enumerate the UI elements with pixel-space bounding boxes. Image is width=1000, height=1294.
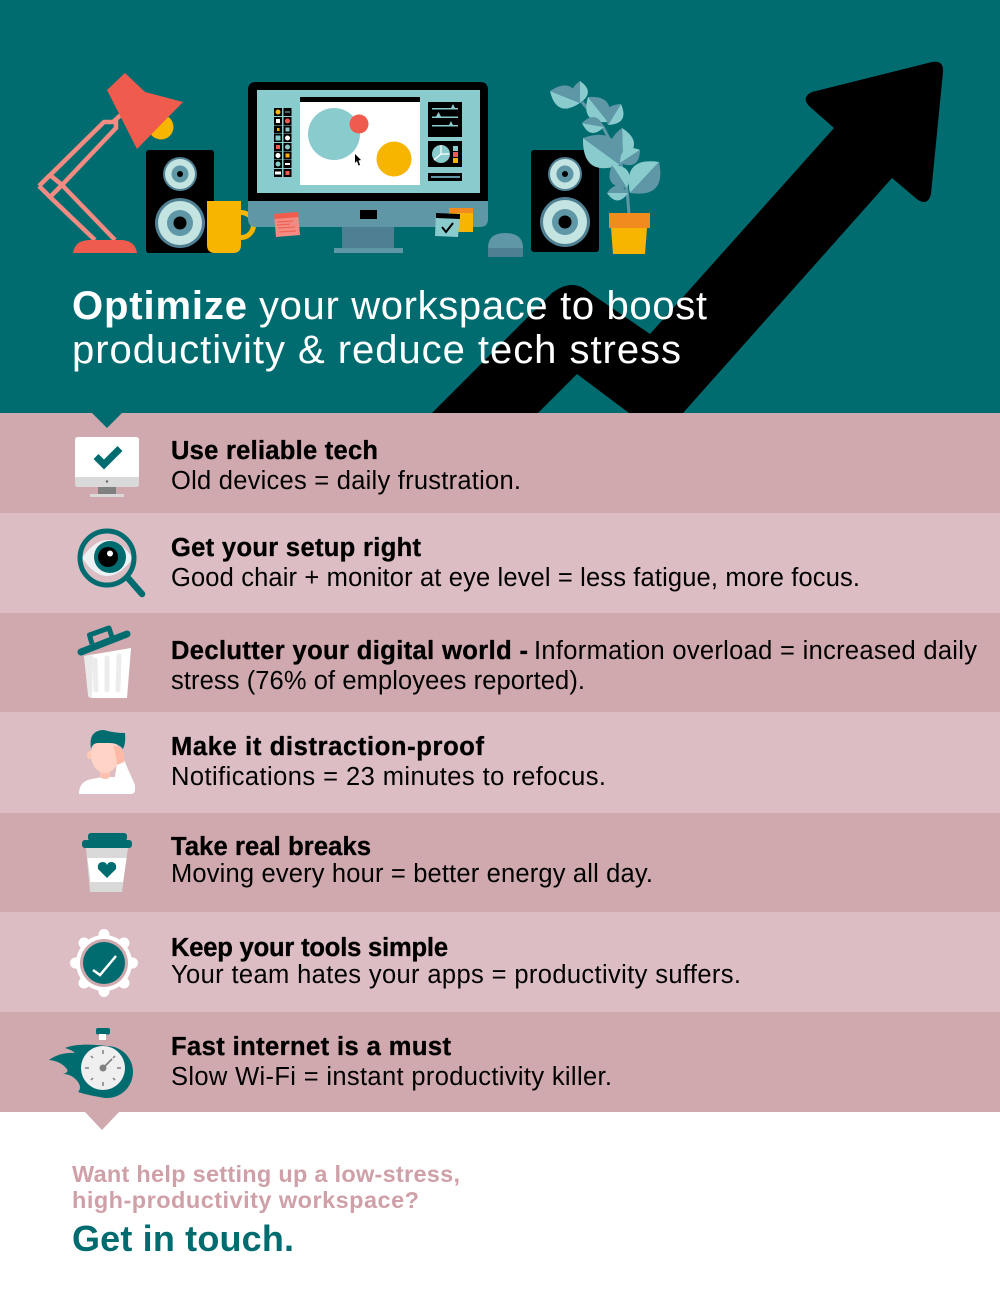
row: declutter: [81, 628, 977, 698]
title line two: productivity & reduce tech stress: [72, 328, 681, 372]
heading: Take real breaks: [171, 833, 371, 861]
illustration: left speaker: [146, 150, 214, 253]
prompt line one: Want help setting up a low-stress,: [72, 1161, 460, 1187]
icon: coffee cup: [82, 833, 132, 892]
pointer: footer notch: [85, 1112, 119, 1130]
title: Optimize: [72, 284, 247, 328]
title line one remainder: your workspace to boost: [259, 284, 707, 328]
icon: eye magnifier: [80, 531, 142, 594]
icon: person: [79, 730, 135, 794]
heading: Use reliable tech: [171, 437, 378, 465]
illustration: mouse: [488, 233, 523, 257]
icon: stopwatch: [49, 1028, 133, 1098]
prompt line two: high-productivity workspace?: [72, 1187, 419, 1213]
band rows background: [0, 413, 1000, 1112]
header background: [0, 0, 1000, 413]
illustration: desk lamp: [39, 73, 183, 253]
heading: Get your setup right: [171, 534, 422, 562]
body line two: stress (76% of employees reported).: [171, 667, 585, 695]
heading: Fast internet is a must: [171, 1033, 452, 1061]
illustration: computer monitor: [248, 82, 488, 253]
illustration: potted plant: [546, 80, 670, 254]
icon: gear with check: [76, 934, 132, 992]
illustration: right speaker: [531, 150, 599, 252]
body: Slow Wi-Fi = instant productivity killer.: [171, 1063, 612, 1091]
icon: trash can: [81, 628, 131, 698]
body: Moving every hour = better energy all day.: [171, 860, 653, 888]
body line one: Information overload = increased daily: [534, 637, 977, 665]
row: internet: [49, 1028, 612, 1098]
body: Good chair + monitor at eye level = less fatigue, more focus.: [171, 564, 860, 592]
row: reliable tech: [75, 437, 521, 497]
growth arrow: [432, 62, 943, 413]
icon: monitor with check: [75, 437, 139, 497]
row: breaks: [82, 833, 653, 892]
heading: Make it distraction-proof: [171, 733, 484, 761]
illustration: yellow mug: [207, 201, 254, 253]
body: Old devices = daily frustration.: [171, 467, 521, 495]
row: setup: [80, 531, 860, 594]
body: Notifications = 23 minutes to refocus.: [171, 763, 606, 791]
body: Your team hates your apps = productivity suffers.: [171, 961, 741, 989]
row: tools: [76, 934, 741, 992]
call to action text: [72, 1161, 460, 1259]
row: distraction: [79, 730, 606, 794]
contact heading: Get in touch.: [72, 1218, 294, 1259]
pointer: header notch: [92, 413, 122, 428]
illustration: red sticky note: [274, 212, 300, 237]
heading: Keep your tools simple: [171, 934, 448, 962]
heading: Declutter your digital world -: [171, 637, 528, 665]
illustration: yellow note and calendar: [435, 208, 473, 237]
